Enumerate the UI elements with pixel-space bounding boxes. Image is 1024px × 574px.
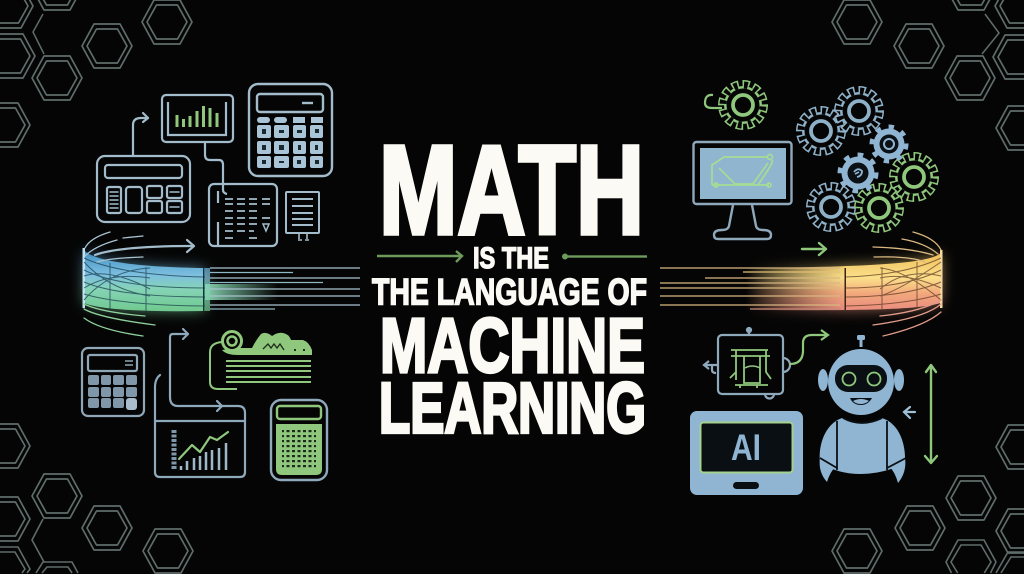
icon: green scroll bbox=[210, 332, 312, 389]
text: is the: IS THE bbox=[473, 242, 549, 275]
icon: green double arrow bbox=[925, 365, 937, 463]
icon: connector line bbox=[205, 142, 227, 194]
icon: data table bbox=[209, 184, 277, 246]
icon: robot bbox=[818, 335, 906, 483]
divider arrow left bbox=[377, 251, 462, 262]
icon: green calculator bbox=[271, 400, 327, 480]
divider line right bbox=[562, 254, 647, 260]
icon: circuit chip bbox=[704, 328, 828, 398]
icon: document bbox=[286, 192, 319, 240]
icon: small left arrow bbox=[904, 407, 915, 418]
heading: machine: MACHINE bbox=[380, 303, 645, 389]
text: the language of: THE LANGUAGE OF bbox=[372, 272, 647, 312]
icon: AI tablet bbox=[690, 411, 803, 495]
icon: curved arrow into table bbox=[95, 240, 194, 255]
hexagon pattern: top left bbox=[0, 0, 192, 147]
icon: control panel bbox=[97, 113, 190, 222]
icon: desktop monitor bbox=[694, 142, 792, 239]
icon: green gear with hook bbox=[705, 83, 765, 127]
heading: learning: LEARNING bbox=[379, 370, 646, 448]
hexagon pattern: bottom left bbox=[0, 424, 193, 573]
icon: green right arrow bbox=[802, 243, 826, 255]
icon: bar chart monitor bbox=[162, 95, 233, 142]
icon: gear cluster bbox=[799, 89, 936, 230]
hexagon pattern: top right bbox=[832, 0, 1024, 150]
icon: AI tablet: AI bbox=[731, 427, 761, 468]
icon: line and bar chart panel bbox=[155, 329, 245, 477]
icon: large calculator bbox=[249, 84, 332, 176]
heading: math: MATH bbox=[379, 120, 644, 260]
hexagon pattern: bottom right bbox=[832, 425, 1024, 573]
right data stream band bbox=[660, 232, 942, 336]
title block bbox=[372, 120, 647, 448]
icon: small calculator bbox=[82, 348, 144, 416]
left data stream band bbox=[82, 232, 360, 336]
